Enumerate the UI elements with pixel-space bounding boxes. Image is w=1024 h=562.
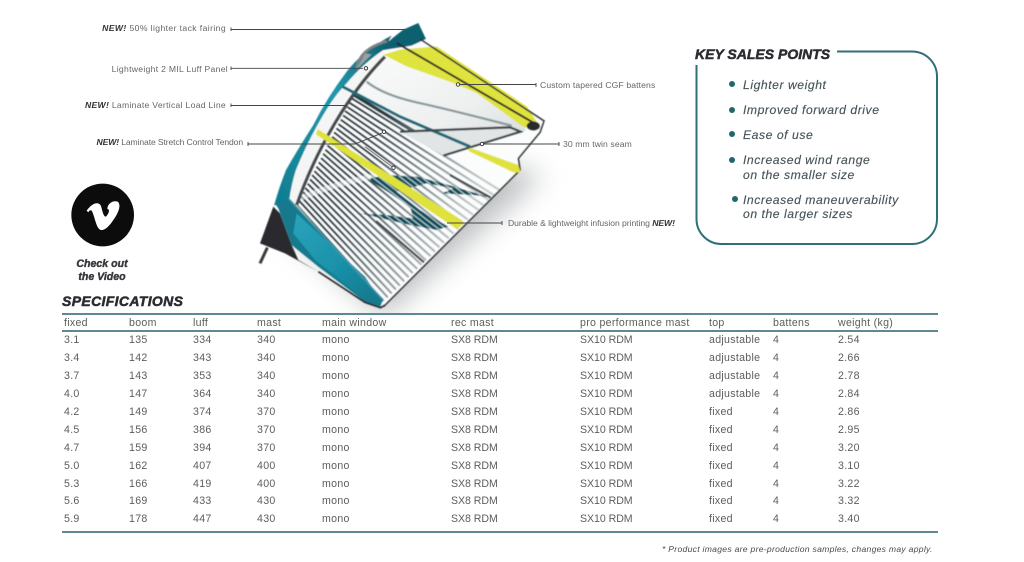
- specifications table: SX8 RDM: [451, 460, 498, 472]
- point 5: [743, 192, 899, 221]
- specifications table: 2.78: [838, 370, 860, 382]
- specifications table: 3.22: [838, 478, 860, 490]
- specifications table: 5.9: [64, 513, 80, 525]
- specifications table: 156: [129, 424, 148, 436]
- specifications table: SX8 RDM: [451, 442, 498, 454]
- specifications table: SX8 RDM: [451, 495, 498, 507]
- specifications table: 400: [257, 460, 276, 472]
- specifications table: mast: [257, 317, 281, 329]
- clew hardware: [527, 121, 540, 131]
- stretch tendon marker: [365, 147, 393, 168]
- specifications table: adjustable: [709, 370, 760, 382]
- specifications table: SX10 RDM: [580, 478, 633, 490]
- foot rim: [288, 198, 383, 300]
- specifications table: SX10 RDM: [580, 352, 633, 364]
- video caption: the Video: [78, 271, 126, 283]
- panel heading: KEY SALES POINTS: [695, 46, 830, 62]
- specifications table: 142: [129, 352, 148, 364]
- specifications table: 4: [773, 495, 779, 507]
- specifications table: SX10 RDM: [580, 334, 633, 346]
- leader: infusion printing: [447, 221, 502, 225]
- specifications table: mono: [322, 388, 350, 400]
- bullet 1: [729, 81, 735, 87]
- specifications table: SX8 RDM: [451, 388, 498, 400]
- marker rings: [364, 67, 484, 169]
- yellow head panel: [383, 46, 537, 128]
- specifications table: 4.7: [64, 442, 80, 454]
- label: battens: Custom tapered CGF battens: [540, 80, 655, 90]
- light band across stripes: [300, 174, 383, 198]
- video caption: Check out: [76, 258, 128, 270]
- specifications table: 3.32: [838, 495, 860, 507]
- specifications table: mono: [322, 495, 350, 507]
- load line: [297, 57, 385, 205]
- point 4: [743, 153, 870, 182]
- upper window panel: [353, 48, 527, 155]
- specifications heading: SPECIFICATIONS: [62, 293, 183, 309]
- specifications table: 2.95: [838, 424, 860, 436]
- head batten: [397, 43, 537, 125]
- specifications table: adjustable: [709, 352, 760, 364]
- specifications table: 2.84: [838, 388, 860, 400]
- point 4: on the smaller size: [743, 168, 855, 182]
- specifications table: adjustable: [709, 388, 760, 400]
- specifications table: [64, 317, 893, 525]
- specifications table: SX10 RDM: [580, 388, 633, 400]
- leader: luff panel: [231, 66, 363, 70]
- specifications table: mono: [322, 478, 350, 490]
- specifications table: 4: [773, 406, 779, 418]
- specifications table: 3.40: [838, 513, 860, 525]
- specifications table: 353: [193, 370, 212, 382]
- specifications table: 143: [129, 370, 148, 382]
- specifications table: 407: [193, 460, 212, 472]
- label: tack fairing: NEW! 50% lighter tack fairing: [102, 23, 226, 33]
- mast base: [260, 248, 267, 263]
- specifications table: SX10 RDM: [580, 460, 633, 472]
- specifications table: 430: [257, 513, 276, 525]
- specifications table: 5.6: [64, 495, 80, 507]
- specifications table: 4: [773, 352, 779, 364]
- sail logo: [360, 175, 490, 230]
- tack bracket: [356, 53, 372, 70]
- specifications table: 3.10: [838, 460, 860, 472]
- leader: stretch tendon: [248, 133, 382, 146]
- point 2: Improved forward drive: [743, 103, 880, 117]
- yellow battens: [316, 129, 521, 229]
- label: twin seam: 30 mm twin seam: [563, 139, 632, 149]
- specifications table: 447: [193, 513, 212, 525]
- specifications table: mono: [322, 352, 350, 364]
- specifications table: mono: [322, 513, 350, 525]
- specifications table: fixed: [709, 460, 733, 472]
- specifications table: 3.4: [64, 352, 80, 364]
- specifications table: 400: [257, 478, 276, 490]
- head teal: [382, 23, 426, 50]
- specifications table: SX8 RDM: [451, 406, 498, 418]
- leader: twin seam: [484, 142, 559, 146]
- specifications table: weight (kg): [838, 317, 893, 329]
- specifications table: SX8 RDM: [451, 478, 498, 490]
- specifications table: fixed: [709, 406, 733, 418]
- point 4: Increased wind range: [743, 153, 870, 167]
- specifications table: fixed: [709, 513, 733, 525]
- specifications table: fixed: [709, 495, 733, 507]
- specifications table: 430: [257, 495, 276, 507]
- specifications table: 370: [257, 406, 276, 418]
- specifications table: SX10 RDM: [580, 424, 633, 436]
- specifications table: 4: [773, 388, 779, 400]
- specifications table: rec mast: [451, 317, 494, 329]
- sail shadow: [287, 148, 543, 317]
- specifications table: 3.7: [64, 370, 80, 382]
- specifications table: SX8 RDM: [451, 352, 498, 364]
- specifications table: 2.66: [838, 352, 860, 364]
- specifications table: SX8 RDM: [451, 370, 498, 382]
- label: load line: NEW! Laminate Vertical Load Line: [85, 100, 226, 110]
- specifications table: 159: [129, 442, 148, 454]
- specifications table: 4: [773, 424, 779, 436]
- leader: load line: [231, 104, 347, 107]
- specifications table: 2.54: [838, 334, 860, 346]
- specifications table: 169: [129, 495, 148, 507]
- specifications table: 340: [257, 352, 276, 364]
- specifications table: 162: [129, 460, 148, 472]
- specifications table: top: [709, 317, 725, 329]
- specifications table: 2.86: [838, 406, 860, 418]
- specifications table: 370: [257, 424, 276, 436]
- sail illustration: [258, 22, 546, 313]
- label: stretch tendon: NEW! Laminate Stretch Control Tendon: [97, 137, 243, 147]
- bullet 4: [729, 157, 735, 163]
- leader: battens: [460, 83, 536, 87]
- specifications table: 370: [257, 442, 276, 454]
- specifications table: 433: [193, 495, 212, 507]
- stripe field: [296, 94, 500, 302]
- specifications table: boom: [129, 317, 157, 329]
- window lower pane: [400, 127, 521, 156]
- specifications table: SX10 RDM: [580, 442, 633, 454]
- leech outline: [383, 39, 544, 307]
- bullet 2: [729, 107, 735, 113]
- dark tack: [260, 207, 318, 272]
- specifications table: 4: [773, 460, 779, 472]
- specifications table: mono: [322, 334, 350, 346]
- sail body: [293, 38, 545, 307]
- specifications table: 135: [129, 334, 148, 346]
- specifications table: main window: [322, 317, 387, 329]
- window outline: [400, 127, 521, 156]
- specifications table: mono: [322, 460, 350, 472]
- footnote: * Product images are pre-production samples, changes may apply.: [662, 544, 933, 554]
- specifications table: 4: [773, 478, 779, 490]
- specifications table: 147: [129, 388, 148, 400]
- point 1: Lighter weight: [743, 78, 826, 92]
- panel border: [696, 50, 938, 245]
- specifications table: 340: [257, 388, 276, 400]
- foot teal panel: [275, 198, 383, 307]
- dark seam marks: [376, 175, 491, 262]
- specifications table: 4: [773, 370, 779, 382]
- specifications table: 166: [129, 478, 148, 490]
- specifications table: mono: [322, 424, 350, 436]
- specifications table: 3.1: [64, 334, 80, 346]
- specifications table: mono: [322, 406, 350, 418]
- specifications table: 419: [193, 478, 212, 490]
- specifications table: 374: [193, 406, 212, 418]
- bullet 3: [729, 131, 735, 137]
- specifications table: SX8 RDM: [451, 424, 498, 436]
- specifications table: 3.20: [838, 442, 860, 454]
- specifications table: 4: [773, 513, 779, 525]
- specifications table: battens: [773, 317, 810, 329]
- specifications table: 394: [193, 442, 212, 454]
- specifications table: luff: [193, 317, 208, 329]
- label: luff panel: Lightweight 2 MIL Luff Panel: [112, 64, 228, 74]
- foot edge: [318, 272, 385, 308]
- label: infusion printing: Durable & lightweight infusion printing NEW!: [508, 218, 675, 228]
- specifications table: mono: [322, 442, 350, 454]
- luff white strip: [290, 51, 385, 205]
- specifications table: SX10 RDM: [580, 495, 633, 507]
- bullet 5: [732, 196, 738, 202]
- leader: tack fairing: [231, 28, 405, 31]
- point 5: Increased maneuverability: [743, 192, 899, 206]
- specifications table: 340: [257, 334, 276, 346]
- panel: key sales points: [695, 46, 938, 245]
- specifications table: fixed: [64, 317, 88, 329]
- specifications table: fixed: [709, 442, 733, 454]
- point 3: Ease of use: [743, 128, 813, 142]
- specifications table: fixed: [709, 424, 733, 436]
- specifications table: 178: [129, 513, 148, 525]
- specifications table: 340: [257, 370, 276, 382]
- specifications table: mono: [322, 370, 350, 382]
- specifications table: SX10 RDM: [580, 513, 633, 525]
- specifications table: 343: [193, 352, 212, 364]
- specifications table: 4: [773, 334, 779, 346]
- icon: vimeo video badge: [71, 184, 134, 246]
- specifications table: 4.5: [64, 424, 80, 436]
- specifications table: adjustable: [709, 334, 760, 346]
- specifications table: 5.0: [64, 460, 80, 472]
- video caption: [76, 258, 128, 283]
- specifications table: 386: [193, 424, 212, 436]
- luff teal panel: [274, 36, 392, 206]
- specifications table: 364: [193, 388, 212, 400]
- foot light panel: [293, 213, 378, 300]
- specifications table: SX8 RDM: [451, 513, 498, 525]
- teal tendon: [343, 87, 470, 147]
- specifications table: 4.2: [64, 406, 80, 418]
- point 5: on the larger sizes: [743, 207, 853, 221]
- specifications table: SX8 RDM: [451, 334, 498, 346]
- specifications table: 334: [193, 334, 212, 346]
- specifications table: fixed: [709, 478, 733, 490]
- specifications table: 4.0: [64, 388, 80, 400]
- specifications table: SX10 RDM: [580, 370, 633, 382]
- specifications table: 4: [773, 442, 779, 454]
- specifications table: SX10 RDM: [580, 406, 633, 418]
- specifications table: pro performance mast: [580, 317, 690, 329]
- specifications table: 149: [129, 406, 148, 418]
- tack fairing: [357, 41, 387, 68]
- specifications table: 5.3: [64, 478, 80, 490]
- top grey batten: [367, 82, 512, 126]
